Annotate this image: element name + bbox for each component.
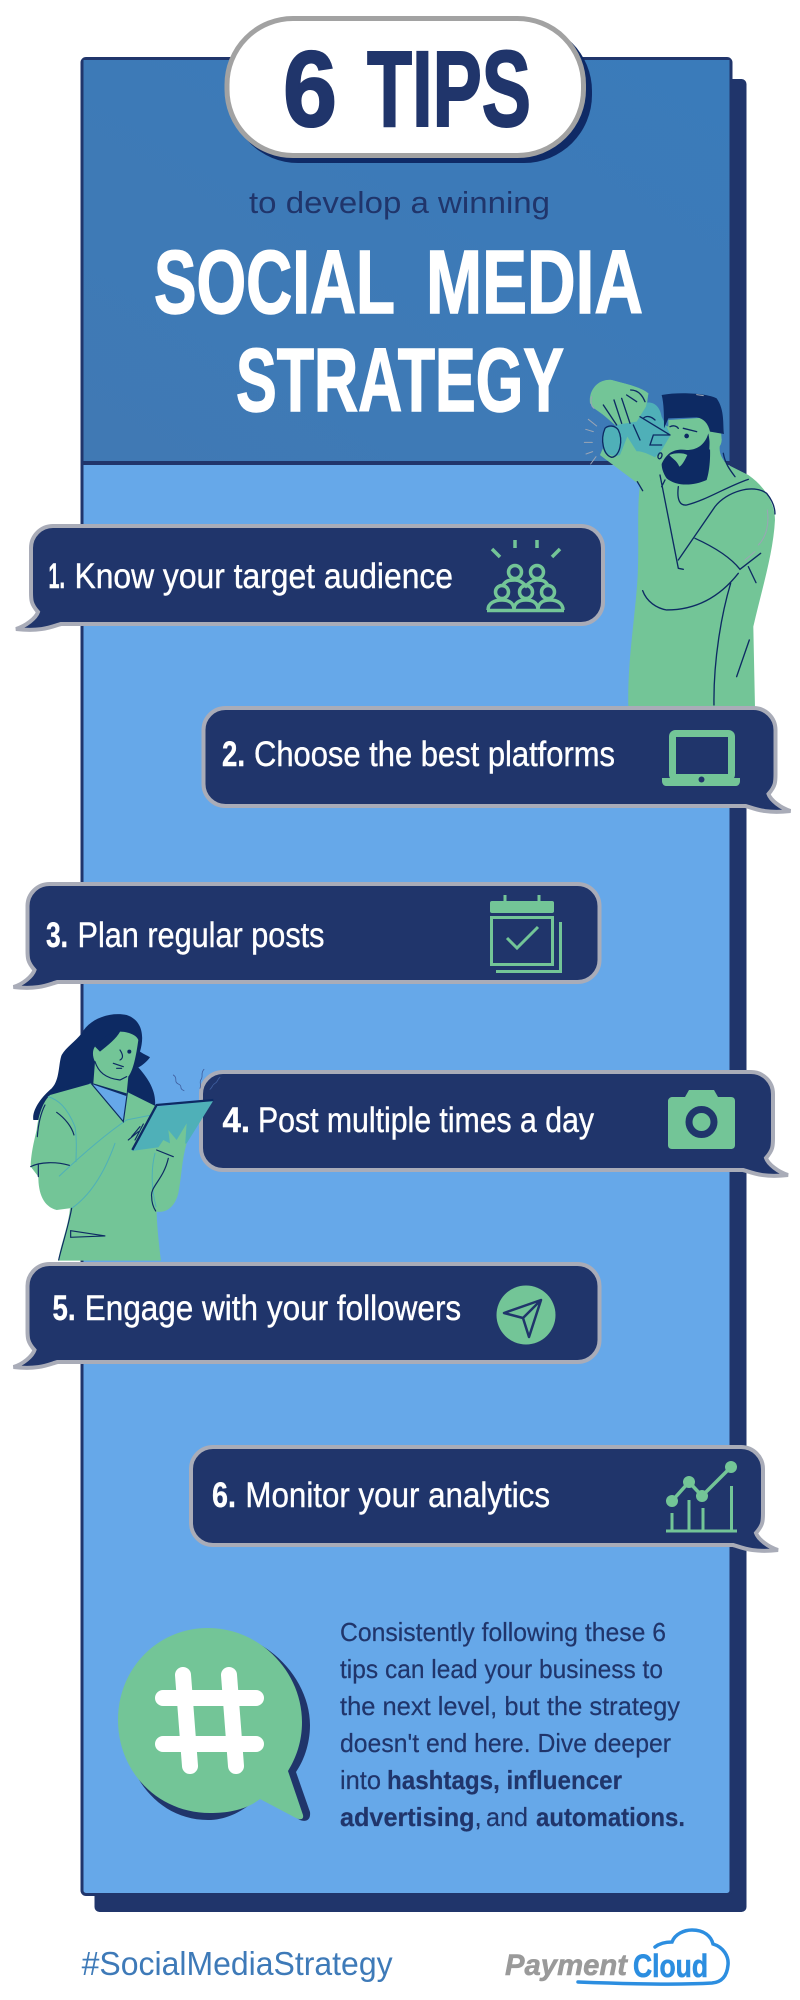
heading: Social Media Strategy xyxy=(154,233,643,431)
closing paragraph: the next level, but the strategy xyxy=(340,1691,680,1721)
icon: audience xyxy=(487,540,564,610)
illustration: woman with tablet xyxy=(31,1014,220,1261)
heading: Social Media Strategy: MEDIA xyxy=(426,233,643,333)
illustration: man with binoculars xyxy=(584,380,775,707)
tip 3 text: 3. xyxy=(46,916,68,955)
icon: line chart xyxy=(666,1461,737,1531)
heading: Social Media Strategy: SOCIAL xyxy=(154,233,395,333)
icon: camera xyxy=(668,1090,735,1149)
closing paragraph: doesn't end here. Dive deeper xyxy=(340,1728,671,1758)
closing paragraph: into xyxy=(340,1765,381,1795)
title pill: 6 TIPS: 6 xyxy=(283,28,337,149)
title pill: 6 TIPS xyxy=(227,18,592,163)
tip 5 text: Engage with your followers xyxy=(85,1289,461,1328)
tip 1 text: 1. xyxy=(48,557,65,596)
tip 6 bubble xyxy=(191,1447,778,1551)
icon: send xyxy=(496,1286,556,1344)
panel: main card with shadow xyxy=(81,58,746,1912)
footer logo: PaymentCloud: Payment xyxy=(505,1949,629,1982)
tip 1 text: Know your target audience xyxy=(74,557,453,596)
tip 6 text: Monitor your analytics xyxy=(245,1476,550,1515)
closing paragraph: , xyxy=(474,1802,482,1832)
tip 5 bubble xyxy=(14,1264,600,1368)
closing paragraph: automations. xyxy=(536,1802,685,1832)
closing paragraph xyxy=(340,1617,685,1832)
tip 3 text: Plan regular posts xyxy=(78,916,324,955)
tip 4 text: Post multiple times a day xyxy=(258,1101,594,1140)
tip 4 bubble xyxy=(201,1072,788,1176)
closing paragraph: tips can lead your business to xyxy=(340,1654,663,1684)
tip 2 bubble xyxy=(204,708,790,812)
tip 3 bubble xyxy=(14,884,600,988)
footer logo: PaymentCloud: Cloud xyxy=(633,1948,708,1984)
icon: calendar xyxy=(490,895,560,972)
tip 4 text: 4. xyxy=(222,1101,250,1140)
heading: Social Media Strategy: STRATEGY xyxy=(236,331,564,431)
closing paragraph: Consistently following these 6 xyxy=(340,1617,666,1647)
closing paragraph: and xyxy=(486,1802,528,1832)
footer hashtag: #SocialMediaStrategy xyxy=(82,1945,393,1982)
tip 6 text: 6. xyxy=(212,1476,236,1515)
tip 5 text: 5. xyxy=(52,1289,76,1328)
tip 2 text: Choose the best platforms xyxy=(254,735,615,774)
icon: laptop xyxy=(662,734,740,786)
closing paragraph: hashtags, influencer xyxy=(387,1765,622,1795)
icon: hashtag speech bubble xyxy=(118,1628,310,1821)
tip 1 bubble xyxy=(16,526,603,630)
footer logo: PaymentCloud xyxy=(505,1930,728,1984)
title pill: 6 TIPS: TIPS xyxy=(367,28,531,149)
tip 2 text: 2. xyxy=(222,735,245,774)
subtitle: to develop a winning xyxy=(249,185,550,220)
closing paragraph: advertising xyxy=(340,1802,474,1832)
